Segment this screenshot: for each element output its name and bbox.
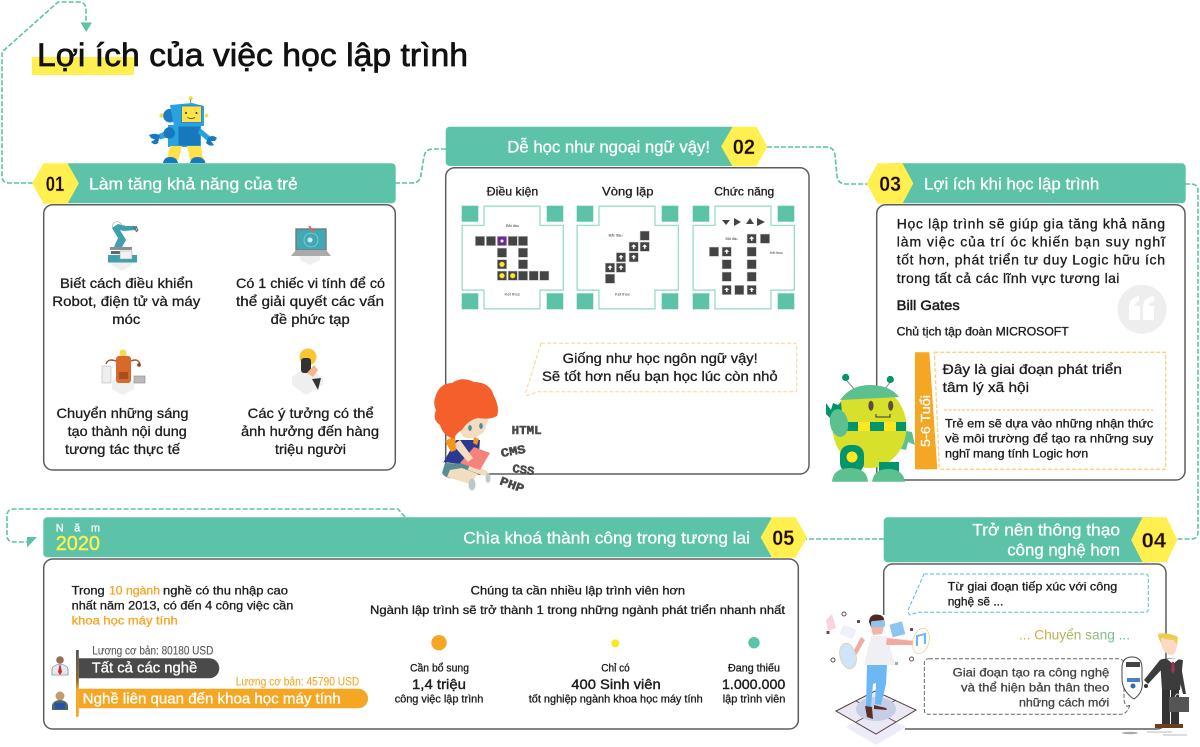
header 02 — [446, 127, 766, 166]
quote text: làm việc của trí óc khiến bạn suy nghĩ — [897, 234, 1166, 250]
text: computer — [236, 275, 385, 327]
stat: 1,000,000 — [722, 637, 786, 705]
header 01: 01 — [46, 173, 64, 196]
header 05: Chìa khoá thành công trong tương lai — [463, 528, 750, 547]
connector: 02 to 03 — [767, 147, 868, 184]
text: computer: thể giải quyết các vấn — [236, 293, 384, 309]
text: top 10 jobs: 10 ngành — [109, 583, 160, 597]
text: robot: Biết cách điều khiển — [60, 275, 193, 291]
illustration: kid reading with code tags — [434, 379, 542, 496]
stat: 1.4 million: công việc lập trình — [395, 693, 483, 705]
text: computer: Có 1 chiếc vi tính để có — [236, 275, 385, 291]
section 03 — [826, 163, 1186, 482]
text: robot — [52, 275, 200, 327]
callout: creation: Giai đoạn tạo ra công nghệ — [953, 666, 1110, 680]
stat: 1,000,000: Đang thiếu — [728, 662, 780, 674]
panel 05 — [44, 559, 798, 729]
text: creations: Chuyển những sáng — [56, 405, 188, 421]
icon: robot arm — [108, 222, 138, 271]
callout: language bubble: Sẽ tốt hơn nếu bạn học lúc còn nhỏ — [542, 368, 778, 384]
connector: 01 to 02 — [395, 149, 446, 183]
illustration: kid reading with code tags: PHP — [498, 475, 526, 496]
board: Vòng lặp: Bắt đầu — [608, 232, 622, 238]
connector: 05 to 01 row — [7, 509, 405, 548]
quote text: tốt hơn, phát triển tư duy Logic hữu ích — [897, 252, 1165, 268]
text: transition: ... Chuyển sang ... — [1019, 626, 1130, 642]
text: robot: Robot, điện tử và máy — [52, 293, 200, 309]
connector: 03 to 04 — [1177, 184, 1198, 539]
text: creations: tương tác thực tế — [65, 441, 180, 457]
text: need more programmers: Chúng ta cần nhiều lập trình viên hơn — [471, 583, 685, 597]
dashed box: psychosocial stage: Đây là giai đoạn phát triển — [943, 361, 1122, 377]
callout: language bubble — [526, 343, 797, 396]
callout: language bubble: Giống như học ngôn ngữ vậy! — [563, 350, 758, 366]
header 03: 03 — [879, 173, 901, 196]
section 02 — [434, 127, 809, 496]
tab: 5-6 Tuổi: 5-6 Tuổi — [918, 395, 933, 447]
text: top 10 jobs — [72, 583, 293, 627]
title: Lợi ích của việc học lập trình — [37, 37, 468, 73]
header 05: 05 — [772, 527, 795, 550]
stat: 1.4 million: Cần bổ sung — [410, 662, 469, 674]
bar chart: salaries: Lương cơ bản: 80180 USD — [92, 643, 214, 657]
author: Bill Gates — [897, 297, 960, 313]
callout: creation: và thể hiện bản thân theo — [961, 681, 1110, 695]
header 02: 02 — [733, 136, 755, 159]
header 03 — [868, 163, 1186, 203]
text: top 10 jobs: nhất năm 2013, có đến 4 công việc cần — [72, 598, 293, 612]
board: Điều kiện: Kết thúc — [504, 292, 520, 296]
icon: office worker — [52, 656, 68, 675]
text: creations — [56, 405, 188, 457]
bar chart: salaries: Tất cả các nghề — [92, 660, 197, 676]
header 03: Lợi ích khi học lập trình — [924, 174, 1099, 193]
board: Chức năng: Kết thúc — [770, 250, 783, 255]
callout: exposure: nghệ sẽ ... — [948, 595, 1003, 609]
section 01 — [33, 163, 396, 470]
stat: 1,000,000: lập trình viên — [723, 693, 785, 705]
header 04: Trở nên thông thạo — [972, 521, 1120, 540]
board: Vòng lặp — [577, 184, 678, 309]
text: need more programmers — [370, 583, 786, 617]
illustration: green robot — [826, 374, 915, 482]
callout: creation — [924, 659, 1130, 714]
author: Chủ tịch tập đoàn MICROSOFT — [897, 324, 1069, 338]
bar chart: salaries: Lương cơ bản: 45790 USD — [236, 675, 360, 689]
author — [897, 297, 1069, 338]
icon: hand with bulb — [292, 348, 323, 395]
dashed box: psychosocial stage: tâm lý xã hội — [943, 379, 1029, 395]
header 02: Dễ học như ngoại ngữ vậy! — [507, 137, 710, 156]
illustration: blue robot — [149, 96, 217, 163]
text: ideas: Các ý tưởng có thể — [248, 405, 374, 421]
illustration: businessman and robot — [1122, 633, 1190, 735]
header 04 — [884, 517, 1176, 562]
text: robot: móc — [112, 311, 140, 327]
panel 03 — [877, 205, 1185, 480]
header 05: 2020 — [56, 533, 100, 555]
connector: header 01 to title — [2, 2, 92, 183]
icon: orange machine — [102, 350, 145, 395]
header 01: Làm tăng khả năng của trẻ — [89, 174, 298, 193]
connector: 04 to 05 — [806, 538, 884, 540]
panel 01 — [44, 205, 395, 470]
section 04 — [826, 517, 1190, 745]
header 05 — [43, 517, 806, 557]
text: computer: đề phức tạp — [271, 311, 350, 327]
board: Vòng lặp: Vòng lặp — [602, 184, 654, 198]
dashed box: psychosocial stage: Trẻ em sẽ dựa vào những nhận thức — [945, 416, 1153, 430]
icon: laptop — [291, 226, 331, 265]
stat: 400 students: tốt nghiệp ngành khoa học máy tính — [529, 693, 703, 705]
board: Điều kiện — [462, 184, 563, 309]
panel 02 — [446, 168, 809, 474]
callout: exposure: Từ giai đoạn tiếp xúc với công — [948, 579, 1117, 593]
stat: 1,000,000: 1.000.000 — [722, 676, 786, 692]
header 01 — [33, 163, 396, 203]
header 05: Năm — [56, 523, 100, 535]
text: ideas — [241, 405, 379, 457]
illustration: kid reading with code tags: CMS — [500, 443, 527, 461]
header 04: 04 — [1142, 530, 1166, 552]
stat: 400 students: 400 Sinh viên — [571, 676, 661, 692]
dashed box: psychosocial stage: về môi trường để tạo ra những suy — [945, 432, 1153, 446]
icon: quotation mark — [1118, 285, 1166, 334]
illustration: VR user — [826, 612, 932, 745]
stat: 400 students: Chỉ có — [601, 662, 630, 674]
stat: 400 students — [529, 639, 703, 705]
icon: programmer — [52, 692, 68, 710]
stat: 1.4 million: 1,4 triệu — [412, 676, 466, 692]
text: need more programmers: Ngành lập trình sẽ trở thành 1 trong những ngành phát triển nhanh nhất — [370, 603, 786, 617]
stat: 1.4 million — [395, 635, 483, 705]
quote text: trong tất cả các lĩnh vực tương lai — [897, 270, 1119, 286]
board: Điều kiện: Điều kiện — [487, 184, 538, 198]
board: Vòng lặp: Kết thúc — [615, 292, 630, 296]
bar chart: salaries — [76, 643, 368, 717]
quote text: Học lập trình sẽ giúp gia tăng khả năng — [897, 215, 1165, 231]
callout: exposure — [908, 574, 1148, 615]
board: Chức năng — [693, 184, 794, 309]
section 05 — [43, 517, 806, 729]
callout: creation: những cách mới — [1019, 696, 1109, 710]
panel 04 — [880, 564, 1166, 733]
board: Chức năng: Chức năng — [714, 184, 774, 198]
text: top 10 jobs: Trong — [72, 583, 105, 597]
dashed box: psychosocial stage: nghĩ mang tính Logic hơn — [945, 447, 1088, 461]
quote text — [897, 215, 1166, 286]
tab: 5-6 Tuổi — [915, 352, 937, 469]
board: Điều kiện: Bắt đầu — [506, 223, 519, 228]
board: Chức năng: Bắt đầu — [726, 236, 738, 241]
dashed box: psychosocial stage — [934, 352, 1166, 469]
text: ideas: ảnh hưởng đến hàng — [241, 423, 379, 439]
illustration: kid reading with code tags: CSS — [511, 462, 535, 479]
text: ideas: triệu người — [275, 441, 346, 457]
illustration: kid reading with code tags: HTML — [512, 424, 542, 438]
text: creations: tạo thành nội dung — [68, 423, 187, 439]
bar chart: salaries: Nghề liên quan đến khoa học máy tính — [83, 690, 341, 708]
text: top 10 jobs: khoa học máy tính — [72, 613, 178, 627]
text: top 10 jobs: nghề có thu nhập cao — [163, 583, 288, 597]
header 04: công nghệ hơn — [1007, 541, 1120, 560]
